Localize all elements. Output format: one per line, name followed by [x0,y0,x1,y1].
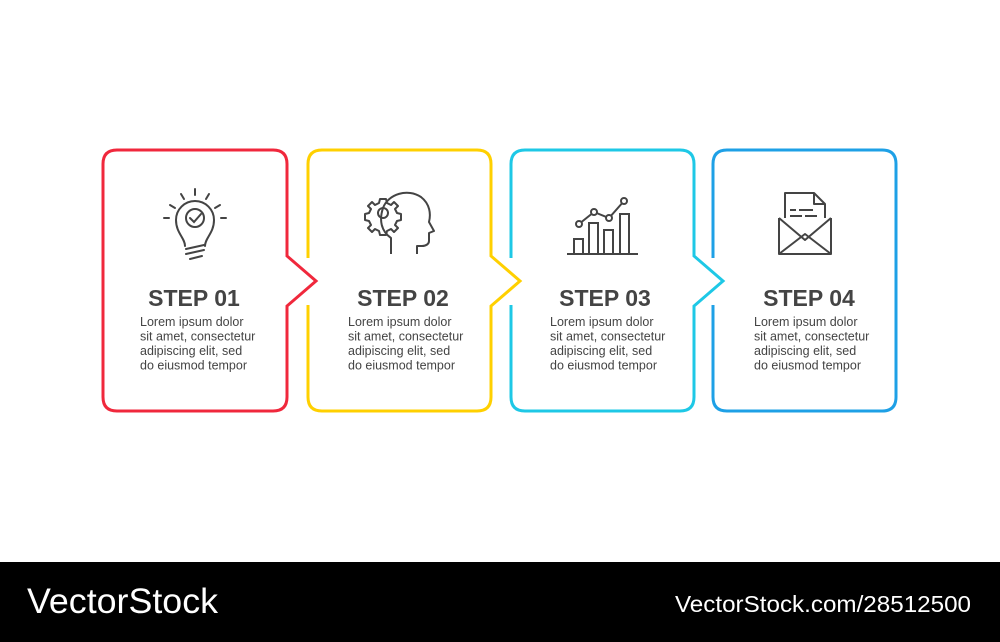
text block: do eiusmod tempor [348,358,455,372]
text block: Lorem ipsum dolor [140,315,244,329]
text block: adipiscing elit, sed [348,344,450,358]
text block: sit amet, consectetur [754,330,869,344]
panel: step 3 [511,150,723,411]
heading: step 01: STEP 01 [148,285,240,311]
icon: lightbulb [164,189,226,259]
icon: head with gear [365,193,434,254]
text block: adipiscing elit, sed [140,344,242,358]
text block: Lorem ipsum dolor [348,315,452,329]
text block: Lorem ipsum dolor [754,315,858,329]
footer url: VectorStock.com/28512500 [675,591,971,617]
text block: adipiscing elit, sed [550,344,652,358]
text block: sit amet, consectetur [140,330,255,344]
text block: do eiusmod tempor [140,358,247,372]
text block: sit amet, consectetur [348,330,463,344]
icon: envelope with letter [779,193,831,254]
text block: do eiusmod tempor [754,358,861,372]
text block: Lorem ipsum dolor [550,315,654,329]
heading: step 04: STEP 04 [763,285,855,311]
heading: step 03: STEP 03 [559,285,651,311]
panel: step 4 [713,150,896,411]
text block: do eiusmod tempor [550,358,657,372]
text block: sit amet, consectetur [550,330,665,344]
heading: step 02: STEP 02 [357,285,449,311]
footer bar [0,562,1000,642]
text block: adipiscing elit, sed [754,344,856,358]
panel: step 1 [103,150,316,411]
icon: bar chart [567,198,638,254]
panel: step 2 [308,150,520,411]
footer logo: VectorStock [27,582,219,621]
